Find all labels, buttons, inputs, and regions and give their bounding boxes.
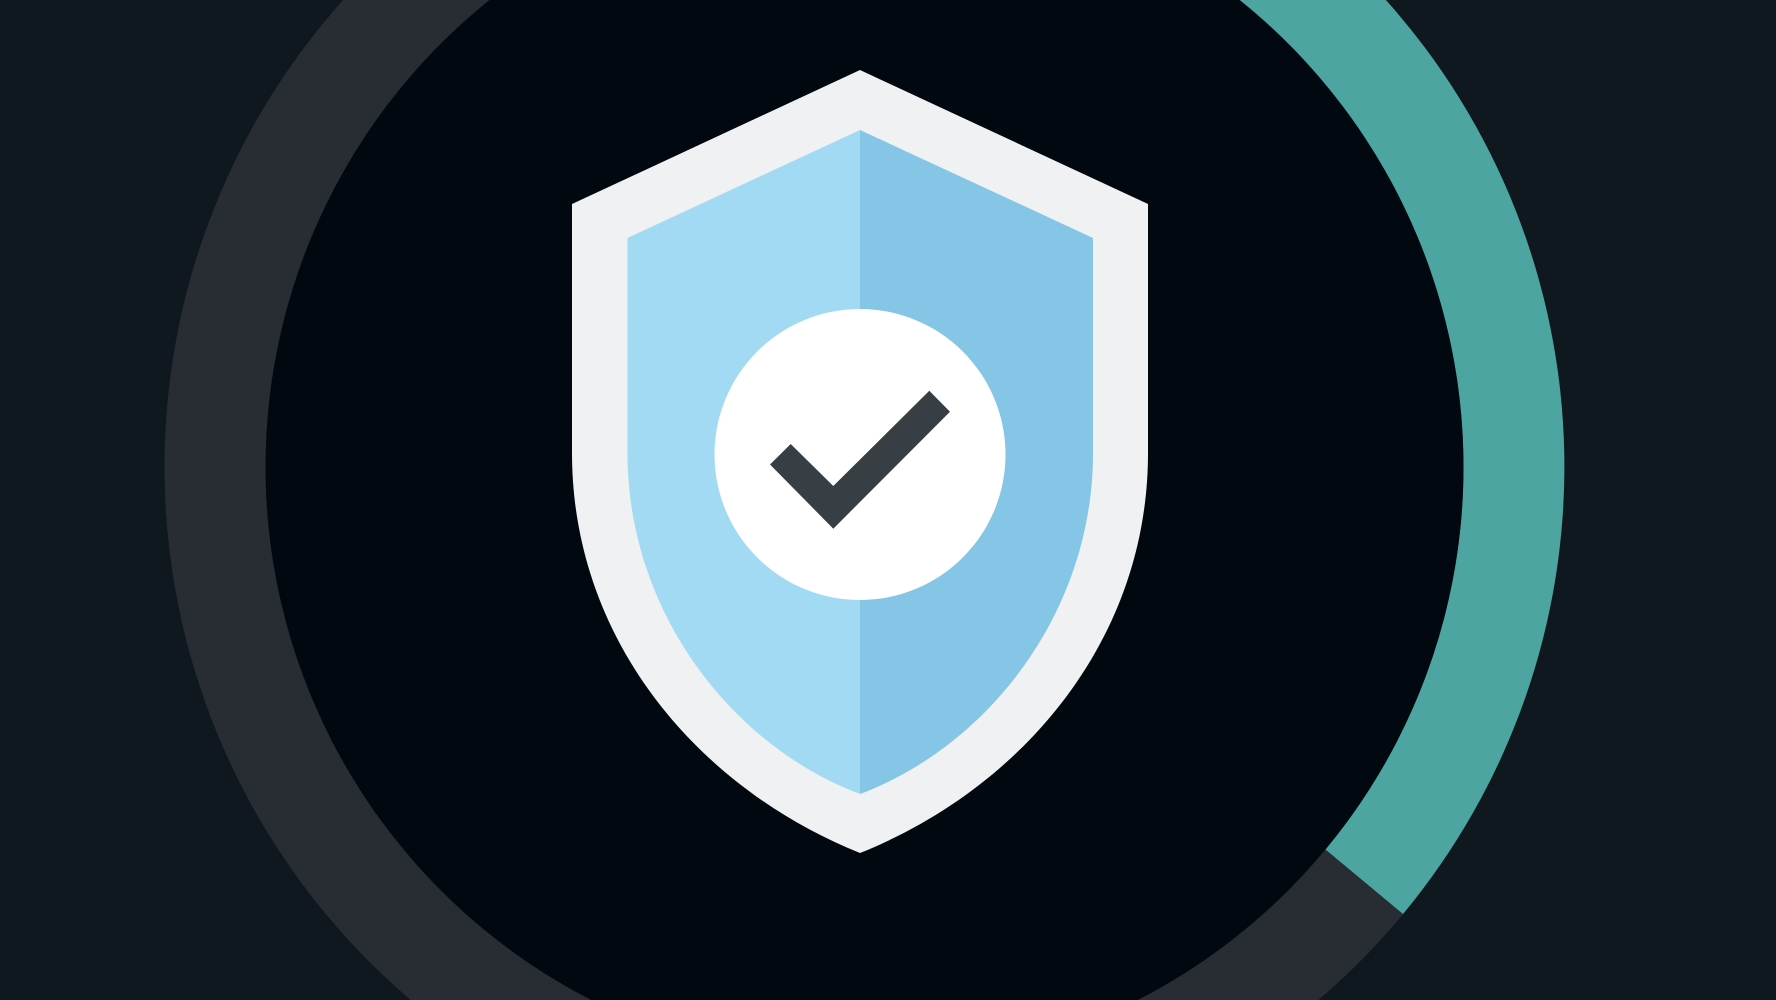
icon: check mark [770,391,950,529]
progress ring track [165,0,1564,1000]
inner dark disc [266,0,1463,1000]
shield left light half [628,130,860,794]
icon: shield [572,70,1148,853]
shield outer border [572,70,1148,853]
progress ring teal arc [1240,0,1564,914]
shield right darker half [860,130,1093,794]
white badge circle [714,309,1006,600]
